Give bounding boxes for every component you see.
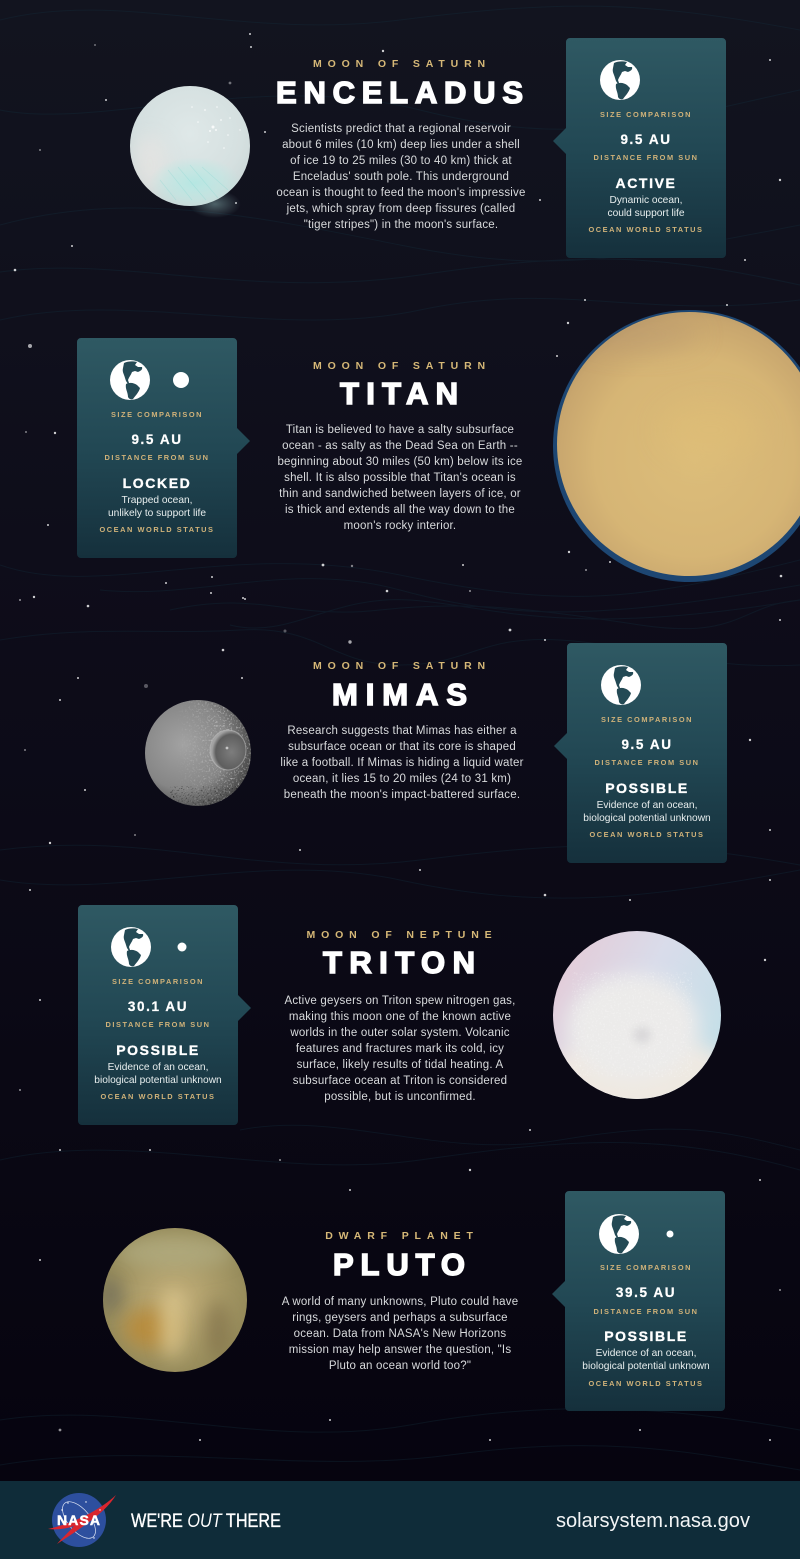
card: Enceladus facts: Dynamic ocean, (609, 195, 683, 206)
website url: solarsystem.nasa.gov (556, 1510, 750, 1532)
card: Mimas facts: SIZE COMPARISON (601, 715, 693, 724)
section: Titan text: beginning about 30 miles (50 km) below its ice (277, 456, 523, 468)
section: Triton text (284, 929, 516, 1103)
icon: Pluto size (666, 1230, 674, 1238)
card: Mimas facts (554, 643, 727, 863)
section: Mimas text: ocean, it lies 15 to 20 miles (24 to 31 km) (293, 773, 511, 785)
footer (0, 1481, 800, 1559)
icon: Triton size (178, 942, 186, 952)
section: Triton text: subsurface ocean at Triton is considered (293, 1075, 507, 1087)
section: Triton text: possible, but is unconfirmed. (324, 1091, 476, 1103)
card: Pluto facts: SIZE COMPARISON (600, 1263, 692, 1272)
card: Pluto facts: biological potential unknown (582, 1361, 710, 1372)
section: Mimas text: like a football. If Mimas is hiding a liquid water (280, 757, 524, 769)
section: Triton text: MOON OF NEPTUNE (306, 929, 498, 941)
icon: Titan size (173, 372, 189, 388)
card: Titan facts: 9.5 AU (131, 432, 183, 447)
card: Mimas facts: Evidence of an ocean, (597, 800, 697, 811)
card: Enceladus facts: 9.5 AU (620, 132, 672, 147)
card: Enceladus facts: DISTANCE FROM SUN (593, 153, 699, 162)
icon: Earth (110, 360, 150, 400)
section: Enceladus text: Enceladus' south pole. This underground (293, 171, 509, 183)
card: Pluto facts: DISTANCE FROM SUN (593, 1307, 699, 1316)
card: Titan facts: unlikely to support life (108, 508, 206, 519)
section: Triton text: Active geysers on Triton spew nitrogen gas, (284, 995, 516, 1007)
planet: Triton (553, 931, 721, 1099)
planet: Mimas (145, 700, 252, 806)
icon: Earth (111, 927, 151, 967)
card: Pluto facts: 39.5 AU (616, 1285, 676, 1300)
section: Titan text: MOON OF SATURN (313, 360, 491, 372)
card: Mimas facts: OCEAN WORLD STATUS (589, 830, 705, 839)
section: Pluto text: mission may help answer the question, "Is (289, 1344, 511, 1356)
section: Mimas text: subsurface ocean or that its core is shaped (288, 741, 516, 753)
card: Enceladus facts: could support life (607, 208, 685, 219)
card: Titan facts: LOCKED (123, 475, 191, 491)
card: Mimas facts: 9.5 AU (621, 737, 673, 752)
card: Triton facts: SIZE COMPARISON (112, 977, 204, 986)
section: Triton text: making this moon one of the known active (289, 1011, 511, 1023)
section: Titan text: thin and sandwiched between layers of ice, or (279, 488, 521, 500)
section: Pluto text: PLUTO (333, 1247, 465, 1282)
section: Mimas text (280, 660, 524, 801)
card: Titan facts: SIZE COMPARISON (111, 410, 203, 419)
section: Titan text: shell. It is also possible that Titan's ocean is (284, 472, 516, 484)
section: Triton text: surface, likely results of tidal heating. A (297, 1059, 504, 1071)
section: Enceladus text: ENCELADUS (276, 75, 523, 110)
icon: Earth (599, 1214, 639, 1254)
section: Titan text (277, 360, 523, 532)
card: Triton facts: DISTANCE FROM SUN (105, 1020, 211, 1029)
section: Enceladus text (276, 58, 526, 231)
card: Enceladus facts: OCEAN WORLD STATUS (588, 225, 704, 234)
section: Pluto text: Pluto an ocean world too?" (329, 1360, 471, 1372)
section: Triton text: worlds in the outer solar system. Volcanic (289, 1027, 510, 1039)
section: Pluto text: DWARF PLANET (325, 1230, 479, 1242)
section: Titan text: ocean - as salty as the Dead Sea on Earth -- (282, 440, 518, 452)
tagline: WE'RE OUT THERE (131, 1511, 281, 1532)
card: Triton facts: POSSIBLE (116, 1042, 200, 1058)
card: Pluto facts: POSSIBLE (604, 1328, 688, 1344)
section: Enceladus text: MOON OF SATURN (313, 58, 491, 70)
section: Enceladus text: "tiger stripes") in the moon's surface. (304, 219, 498, 231)
planet: Pluto (101, 1228, 247, 1372)
section: Mimas text: MIMAS (332, 677, 467, 712)
card: Mimas facts: biological potential unknown (583, 813, 711, 824)
card: Enceladus facts: ACTIVE (616, 175, 676, 191)
section: Enceladus text: ocean is thought to feed the moon's impressive (276, 187, 526, 199)
planet: Enceladus (130, 86, 250, 218)
section: Mimas text: MOON OF SATURN (313, 660, 491, 672)
card: Pluto facts: OCEAN WORLD STATUS (588, 1379, 704, 1388)
icon: Earth (600, 60, 640, 100)
section: Titan text: is thick and extends all the way down to the (285, 504, 515, 516)
card: Pluto facts (552, 1191, 725, 1411)
card: Triton facts: 30.1 AU (128, 999, 188, 1014)
section: Titan text: moon's rocky interior. (344, 520, 456, 532)
section: Pluto text: rings, geysers and perhaps a subsurface (292, 1312, 508, 1324)
card: Mimas facts: DISTANCE FROM SUN (594, 758, 700, 767)
section: Enceladus text: about 6 miles (10 km) deep lies under a shell (282, 139, 520, 151)
section: Pluto text: ocean. Data from NASA's New Horizons (294, 1328, 506, 1340)
section: Triton text: features and fractures mark its cold, icy (296, 1043, 504, 1055)
section: Titan text: TITAN (340, 376, 458, 411)
section: Pluto text: A world of many unknowns, Pluto could have (282, 1296, 518, 1308)
section: Enceladus text: of ice 19 to 25 miles (30 to 40 km) thick at (290, 155, 512, 167)
card: Enceladus facts (553, 38, 726, 258)
card: Triton facts: Evidence of an ocean, (108, 1062, 208, 1073)
card: Mimas facts: POSSIBLE (605, 780, 689, 796)
card: Triton facts: biological potential unknown (94, 1075, 222, 1086)
card: Titan facts: OCEAN WORLD STATUS (99, 525, 215, 534)
card: Titan facts: Trapped ocean, (122, 495, 192, 506)
section: Mimas text: Research suggests that Mimas has either a (287, 725, 517, 737)
card: Titan facts (77, 338, 250, 558)
card: Triton facts (78, 905, 251, 1125)
card: Titan facts: DISTANCE FROM SUN (104, 453, 210, 462)
section: Triton text: TRITON (323, 945, 475, 980)
section: Enceladus text: jets, which spray from deep fissures (called (286, 203, 515, 215)
section: Pluto text (282, 1230, 518, 1372)
card: Triton facts: OCEAN WORLD STATUS (100, 1092, 216, 1101)
planet: Titan (553, 310, 800, 582)
card: Enceladus facts: SIZE COMPARISON (600, 110, 692, 119)
icon: NASA logo (48, 1493, 116, 1547)
section: Titan text: Titan is believed to have a salty subsurface (286, 424, 514, 436)
icon: Earth (601, 665, 641, 705)
section: Mimas text: beneath the moon's impact-battered surface. (284, 789, 520, 801)
section: Enceladus text: Scientists predict that a regional reservoir (291, 123, 511, 135)
card: Pluto facts: Evidence of an ocean, (596, 1348, 696, 1359)
icon: NASA logo: NASA (57, 1512, 100, 1528)
